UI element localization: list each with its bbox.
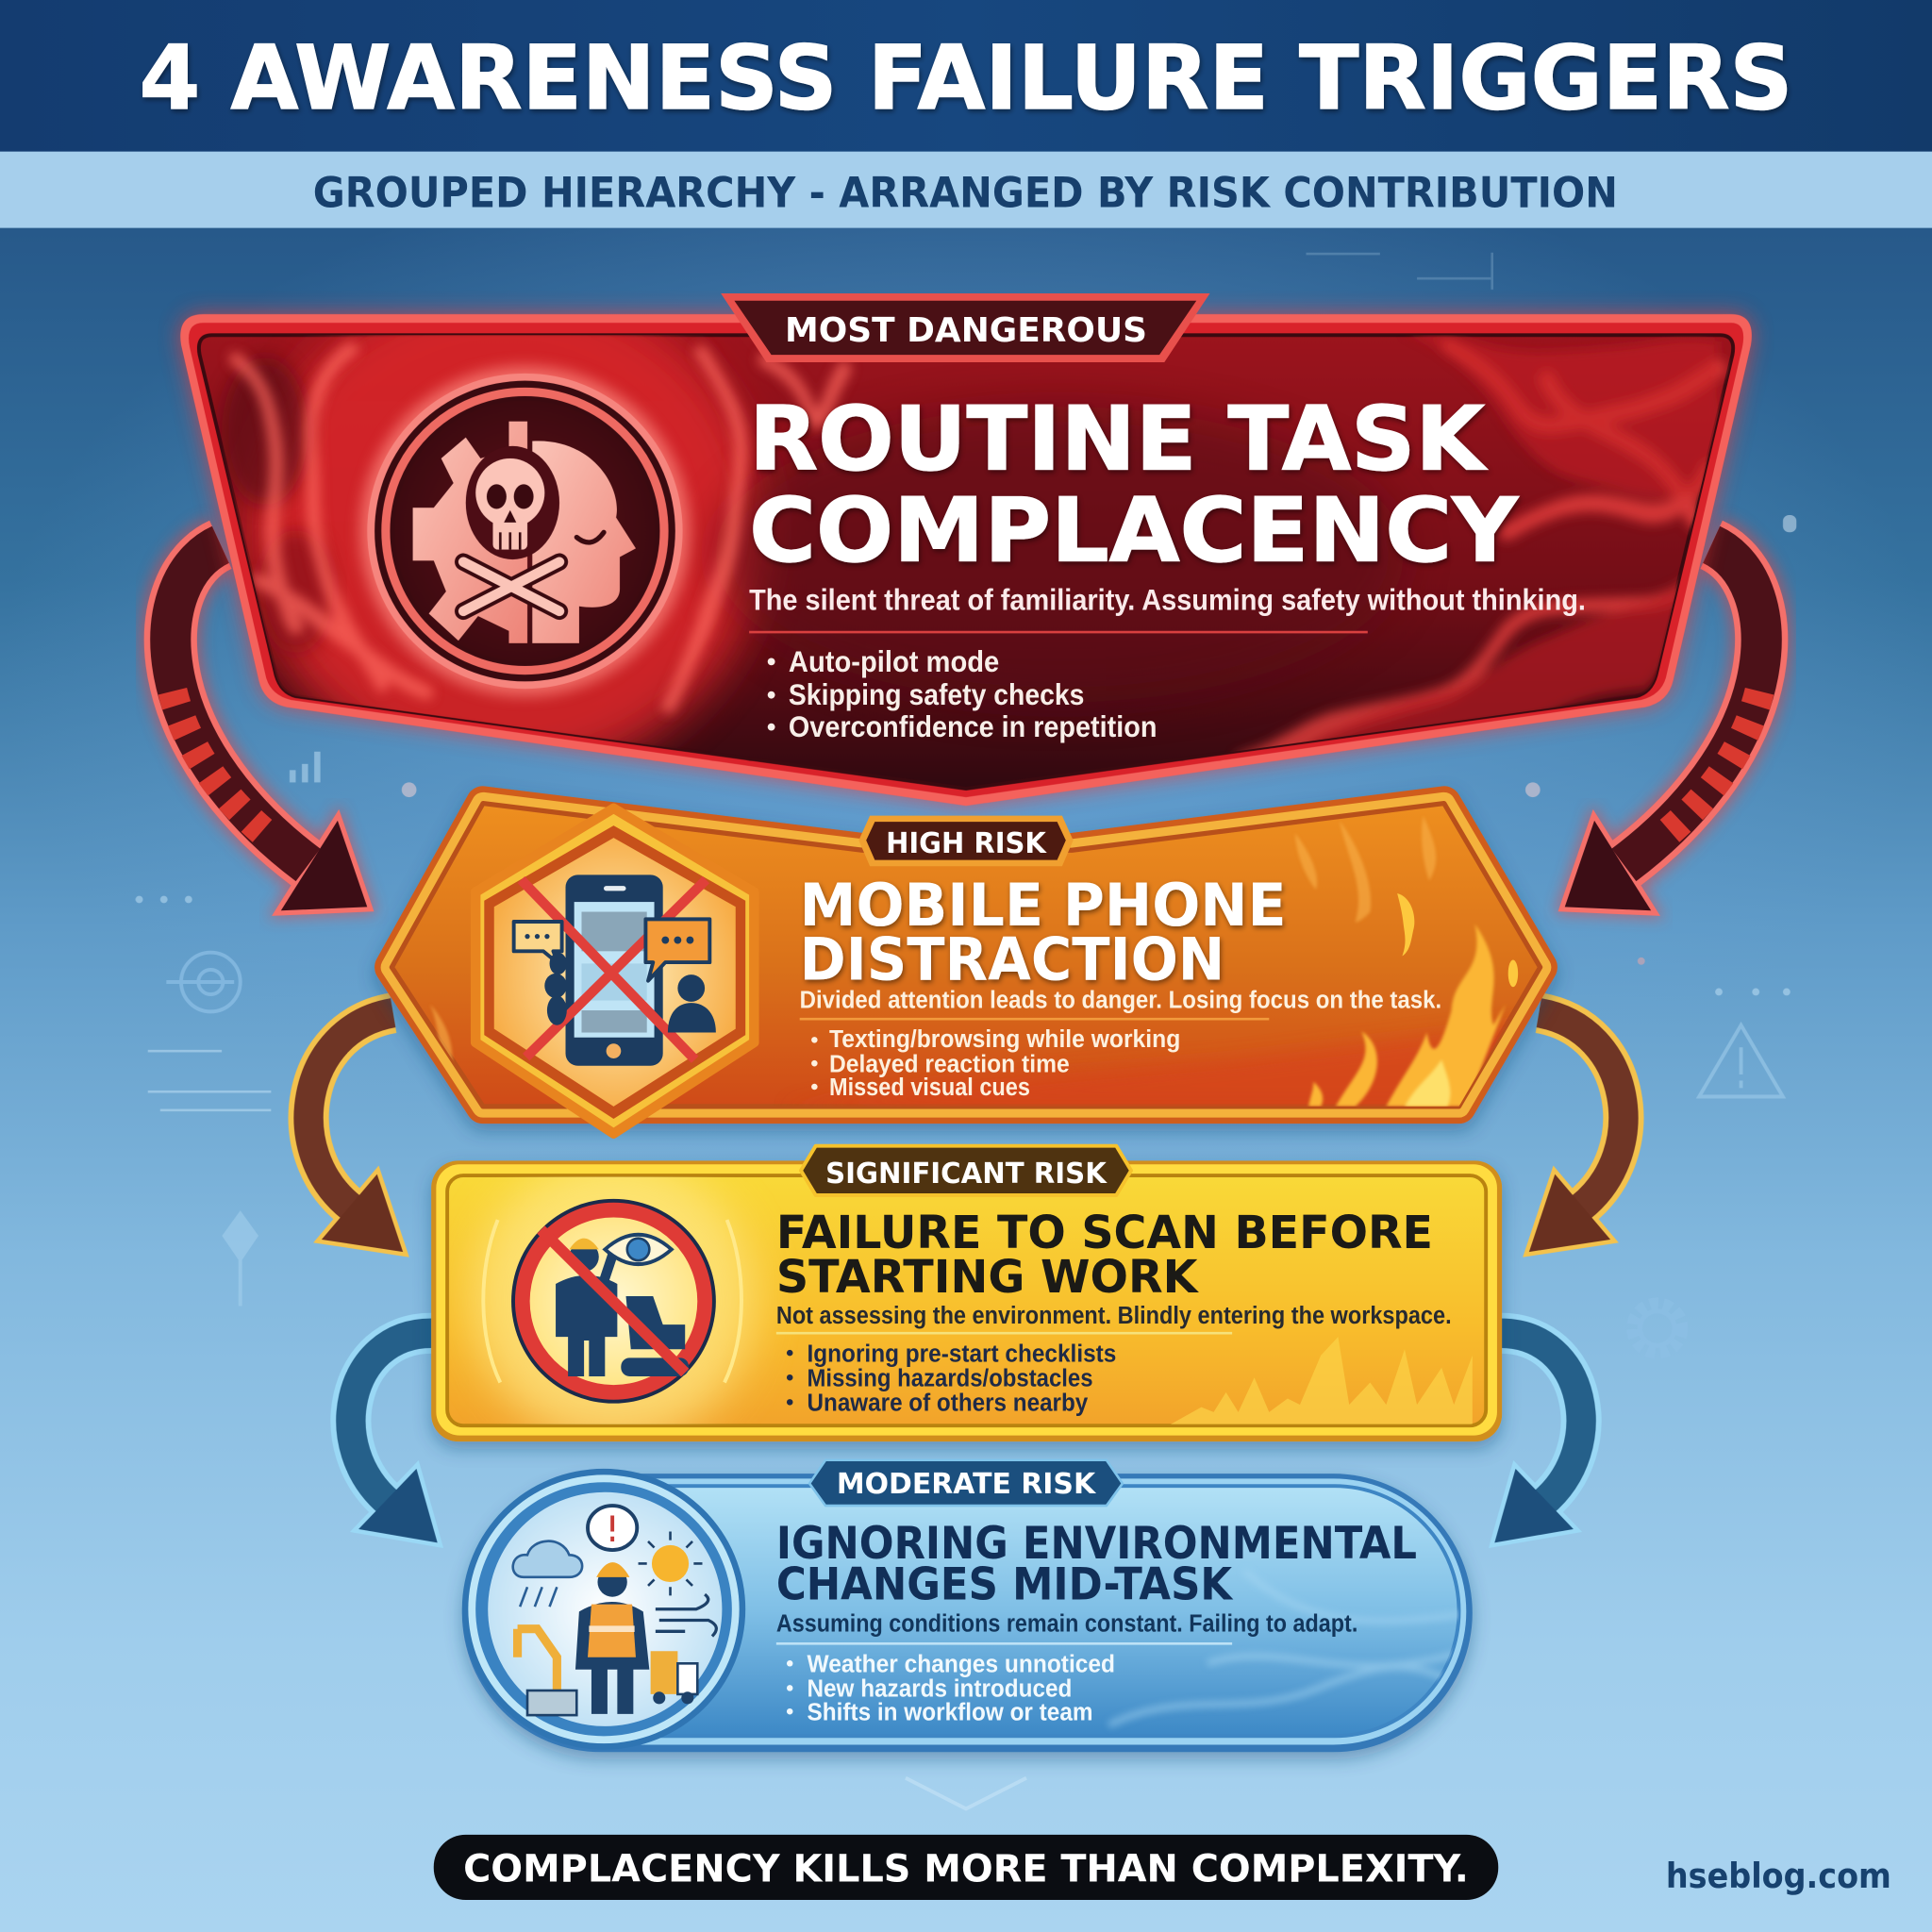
bullet list: Ignoring pre-start checklists	[808, 1341, 1116, 1367]
heading: FAILURE TO SCAN BEFORE	[776, 1207, 1433, 1259]
flame texture	[472, 1159, 1473, 1442]
description: Not assessing the environment. Blindly entering the workspace.	[776, 1303, 1452, 1329]
footer callout	[434, 1835, 1498, 1900]
badge: moderate risk	[809, 1460, 1123, 1506]
badge: significant risk: SIGNIFICANT RISK	[825, 1158, 1108, 1191]
icon: gear	[1633, 1304, 1682, 1353]
bullet list: Unaware of others nearby	[808, 1391, 1089, 1417]
description: Divided attention leads to danger. Losing focus on the task.	[800, 987, 1441, 1013]
description: Assuming conditions remain constant. Failing to adapt.	[776, 1610, 1357, 1637]
heading: IGNORING ENVIRONMENTAL	[776, 1518, 1417, 1570]
bullet list: Skipping safety checks	[789, 678, 1084, 711]
arrow: blue right	[1494, 1333, 1581, 1542]
bullet list	[787, 1651, 1115, 1725]
badge: high risk	[858, 816, 1074, 866]
arrow: red left	[171, 544, 367, 910]
heading	[800, 871, 1287, 993]
data dots and lines	[136, 253, 1790, 1111]
subtitle band	[0, 152, 1932, 228]
description: The silent threat of familiarity. Assuming safety without thinking.	[749, 584, 1586, 617]
icon: no scan worker	[483, 1199, 741, 1404]
panel: mobile phone distraction	[391, 804, 1541, 1134]
bullet list: Weather changes unnoticed	[808, 1651, 1115, 1677]
arrow: orange left	[308, 1013, 403, 1252]
bullet list: Missing hazards/obstacles	[808, 1365, 1093, 1391]
heading	[749, 389, 1520, 582]
title: 4 AWARENESS FAILURE TRIGGERS	[140, 27, 1792, 130]
bullet list: Texting/browsing while working	[829, 1026, 1180, 1053]
badge: high risk: HIGH RISK	[886, 827, 1048, 860]
badge: significant risk	[801, 1146, 1131, 1195]
wave texture	[1109, 1571, 1466, 1725]
decorative background tech icons	[136, 253, 1796, 1353]
heading	[776, 1207, 1433, 1304]
badge: most dangerous: MOST DANGEROUS	[785, 311, 1147, 350]
bullet list: Missed visual cues	[829, 1074, 1030, 1101]
panel: ignoring environmental changes mid-task	[462, 1460, 1473, 1752]
icon: target	[166, 953, 241, 1011]
icon: worker with changing environment	[462, 1469, 745, 1750]
heading: ROUTINE TASK	[749, 389, 1488, 491]
heading: MOBILE PHONE	[800, 871, 1287, 940]
footer callout: COMPLACENCY KILLS MORE THAN COMPLEXITY.	[463, 1845, 1469, 1890]
heading	[776, 1518, 1417, 1610]
heading: STARTING WORK	[776, 1251, 1199, 1304]
arrow: red right	[1565, 544, 1761, 910]
swirling red texture	[215, 335, 1730, 752]
bullet list	[787, 1341, 1116, 1417]
icon: no mobile phone	[475, 808, 754, 1134]
bullet list	[811, 1026, 1180, 1101]
icon: gear, head and skull	[359, 366, 690, 696]
panel: routine task complacency	[180, 285, 1752, 806]
arrow: blue left	[351, 1333, 438, 1542]
bullet list: Auto-pilot mode	[789, 645, 999, 678]
bullet list: New hazards introduced	[808, 1676, 1072, 1703]
heading: DISTRACTION	[800, 924, 1224, 993]
icon: warning triangle	[1699, 1025, 1783, 1096]
icon: diamond	[225, 1214, 257, 1306]
bullet list: Shifts in workflow or team	[808, 1699, 1093, 1725]
header band with title	[0, 0, 1932, 152]
badge: moderate risk: MODERATE RISK	[837, 1468, 1097, 1501]
arrow: orange right	[1529, 1013, 1624, 1252]
bullet list: Delayed reaction time	[829, 1051, 1070, 1077]
bullet list: Overconfidence in repetition	[789, 710, 1157, 743]
flame texture	[430, 816, 1541, 1109]
bullet list	[768, 645, 1157, 743]
heading: COMPLACENCY	[749, 479, 1520, 582]
chevron	[906, 1778, 1026, 1808]
panel: failure to scan before starting work	[431, 1146, 1502, 1442]
website credit: hseblog.com	[1666, 1856, 1891, 1896]
heading: CHANGES MID-TASK	[776, 1558, 1234, 1610]
subtitle: GROUPED HIERARCHY - ARRANGED BY RISK CONTRIBUTION	[313, 169, 1618, 217]
badge: most dangerous	[721, 293, 1210, 362]
